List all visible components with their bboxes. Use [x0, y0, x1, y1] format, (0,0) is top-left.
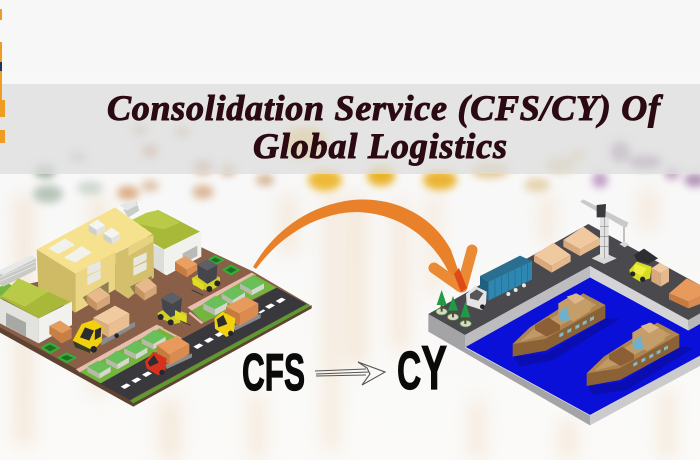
ship one	[513, 293, 605, 357]
title	[107, 88, 663, 166]
title: Consolidation Service (CFS/CY) Of	[107, 88, 663, 128]
yellow truck with cartons	[73, 306, 135, 353]
arrow: thin CFS to CY	[315, 362, 385, 385]
forklift upper	[192, 259, 220, 295]
pallets at loading doors	[87, 256, 197, 311]
ship two	[587, 323, 679, 386]
label: CY: CY	[397, 334, 447, 403]
planter blocks	[87, 277, 264, 379]
blue container truck	[466, 256, 532, 310]
tower crane	[580, 199, 629, 264]
cartons on dock	[534, 227, 700, 308]
illustration: CFS warehouse yard	[0, 200, 312, 407]
illustration: CY container port	[428, 199, 700, 425]
rear warehouse	[120, 200, 201, 275]
road with lane markings	[99, 288, 311, 403]
red truck on road	[145, 336, 192, 375]
main warehouse building	[37, 207, 154, 313]
forklift	[629, 249, 658, 282]
title band	[0, 84, 700, 174]
logo fragment at left edge	[0, 9, 5, 143]
ground platform	[0, 247, 312, 407]
title: Global Logistics	[253, 126, 507, 166]
dock L-shaped surface	[428, 224, 700, 347]
label: CFS: CFS	[242, 344, 305, 402]
yellow truck on road	[214, 297, 261, 337]
forklift lower	[157, 292, 191, 325]
arrow: curved orange CFS to CY	[253, 199, 472, 292]
front-left warehouse	[0, 278, 72, 343]
lawn strips	[76, 273, 277, 383]
trees	[436, 290, 471, 327]
green pits	[40, 255, 241, 363]
white pallet stack	[0, 255, 36, 287]
water basin and sides	[428, 277, 700, 425]
